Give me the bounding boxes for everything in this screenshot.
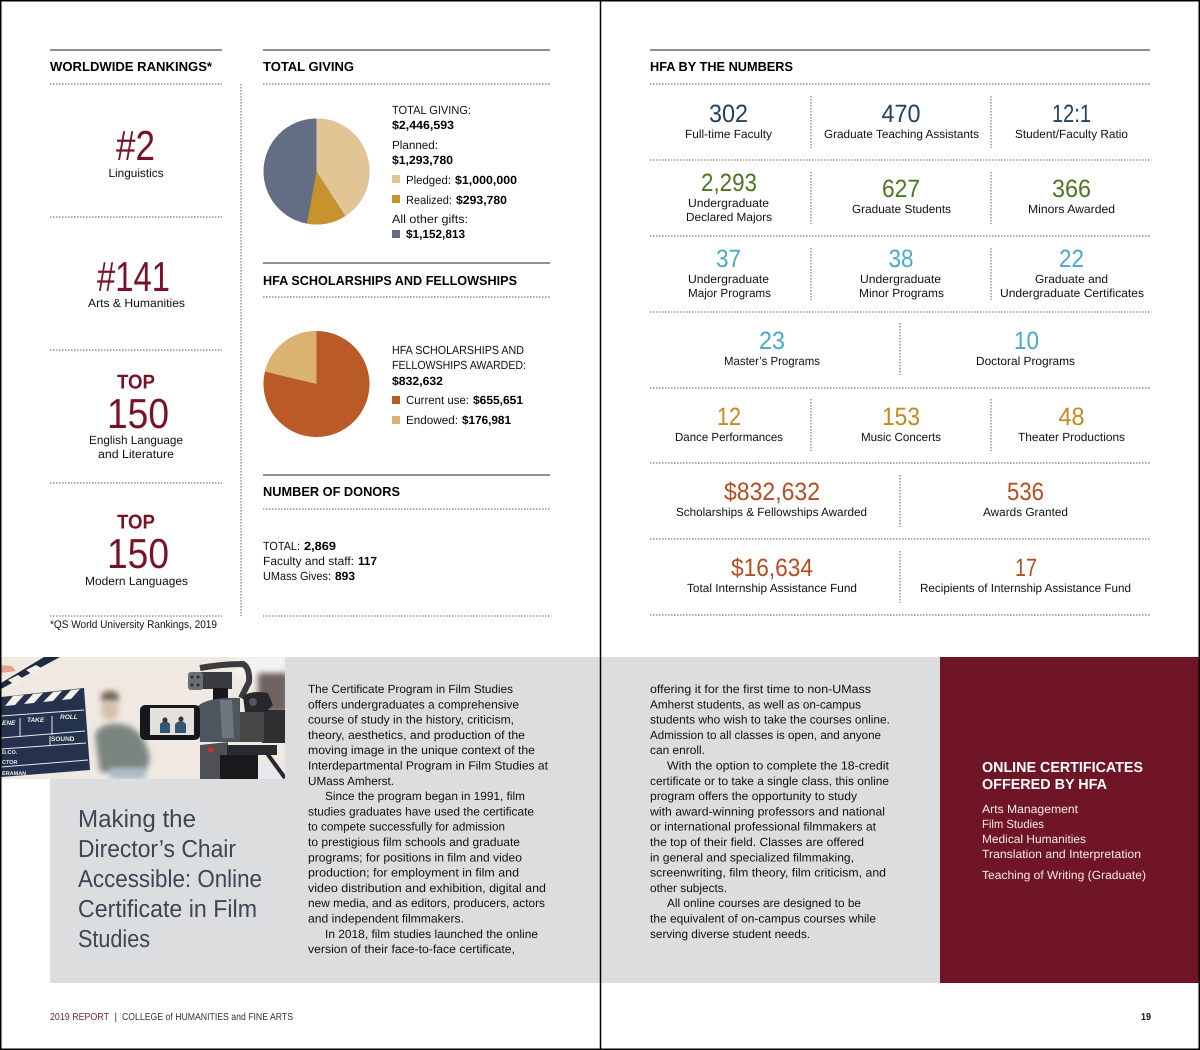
stat row: scholarships: $832,632 xyxy=(724,478,820,506)
text block: article column one: moving image in the unique context of the xyxy=(308,743,535,757)
total giving legend: $1,152,813 xyxy=(406,227,465,241)
stat row: programs: Undergraduate xyxy=(688,272,769,286)
stat row: graduate programs: 23 xyxy=(759,327,785,355)
stat row: faculty: Full-time Faculty xyxy=(685,127,772,141)
photo: clapperboard and video camera xyxy=(1,657,288,779)
donor counts: TOTAL: xyxy=(263,539,300,553)
stat row: faculty: 302 xyxy=(709,100,748,128)
heading: scholarships and fellowships: HFA SCHOLARSHIPS AND FELLOWSHIPS xyxy=(263,273,517,288)
panel: hfa by the numbers xyxy=(650,50,1150,615)
stat row: performances: Dance Performances xyxy=(675,430,783,444)
donor counts xyxy=(263,539,377,583)
text block: article column one: In 2018, film studies launched the online xyxy=(325,927,538,941)
scholarships legend: $655,651 xyxy=(473,393,523,407)
donor counts: 2,869 xyxy=(304,539,336,553)
stat row: programs: Undergraduate Certificates xyxy=(1000,286,1144,300)
text block: article column two: offering it for the first time to non-UMass xyxy=(650,682,871,696)
stat row: faculty: Graduate Teaching Assistants xyxy=(824,127,979,141)
pie chart: scholarships xyxy=(264,331,370,437)
scholarships legend: $832,632 xyxy=(392,374,443,388)
stat row: programs: Major Programs xyxy=(688,286,771,300)
text block: article column one: to compete successfully for admission xyxy=(308,820,505,834)
stat row: faculty xyxy=(685,100,1128,141)
stat row: students: Declared Majors xyxy=(686,210,772,224)
photo: clapperboard and video camera: ERAMAN xyxy=(2,771,26,777)
ranking: linguistics xyxy=(108,122,164,180)
scholarships legend: Endowed: xyxy=(406,413,458,427)
stat row: internships: 17 xyxy=(1015,554,1037,582)
page number: 19 xyxy=(1141,1012,1151,1023)
ranking: modern languages: TOP xyxy=(117,512,155,534)
text block: article column one: programs; for positions in film and video xyxy=(308,850,522,864)
stat row: graduate programs xyxy=(724,327,1075,368)
text block: article column two: or international professional filmmakers at xyxy=(650,820,877,834)
donor counts: 117 xyxy=(358,554,377,568)
text block: article column one: Interdepartmental Program in Film Studies at xyxy=(308,758,549,772)
total giving legend: $2,446,593 xyxy=(392,118,454,132)
text block: article column two: Admission to all classes is open, and anyone xyxy=(650,728,881,742)
stat row: scholarships: 536 xyxy=(1007,478,1044,506)
panel: online certificates xyxy=(940,657,1199,983)
text block: article column one: version of their face-to-face certificate, xyxy=(308,942,515,956)
text block: article column one: UMass Amherst. xyxy=(308,774,394,788)
title: making the director's chair: Making the xyxy=(78,806,196,833)
panel: number of donors xyxy=(263,475,550,616)
scholarships legend xyxy=(392,343,526,427)
heading: number of donors: NUMBER OF DONORS xyxy=(263,484,400,499)
text block: article column one: video distribution and exhibition, digital and xyxy=(308,881,546,895)
footer: | xyxy=(114,1012,117,1023)
certificate list: Arts Management xyxy=(982,802,1079,816)
stat row: graduate programs: Doctoral Programs xyxy=(976,354,1075,368)
heading: online certificates: OFFERED BY HFA xyxy=(982,777,1108,793)
photo: clapperboard and video camera: SOUND xyxy=(51,736,75,743)
footer xyxy=(50,1012,1151,1023)
text block: article column one: Since the program began in 1991, film xyxy=(325,789,525,803)
certificate list: Translation and Interpretation xyxy=(982,847,1141,861)
text block: article column two: certificate or to take a single class, this online xyxy=(650,774,889,788)
stat row: programs: 37 xyxy=(716,245,741,273)
text block: article column one: offers undergraduates a comprehensive xyxy=(308,697,519,711)
text block: article column two: the equivalent of on-campus courses while xyxy=(650,912,876,926)
stat row: scholarships: Awards Granted xyxy=(983,505,1068,519)
stat row: performances: Music Concerts xyxy=(861,430,941,444)
stat row: programs: Minor Programs xyxy=(859,286,944,300)
certificate list: Teaching of Writing (Graduate) xyxy=(982,868,1146,882)
certificate list: Film Studies xyxy=(982,817,1044,831)
ranking: english language and literature: English Language xyxy=(89,433,183,447)
scholarships legend: Current use: xyxy=(406,393,469,407)
donor counts: UMass Gives: xyxy=(263,569,331,583)
ranking: linguistics: Linguistics xyxy=(108,166,164,180)
panel: worldwide rankings xyxy=(50,50,241,631)
text block: article column two: students who wish to take the courses online. xyxy=(650,713,890,727)
ranking: modern languages: 150 xyxy=(107,530,169,577)
title: making the director's chair: Director’s Chair xyxy=(78,836,236,863)
stat row: programs: Graduate and xyxy=(1035,272,1108,286)
title: making the director's chair: Accessible: Online xyxy=(78,866,262,893)
text block: article column two: other subjects. xyxy=(650,881,727,895)
footer: COLLEGE of HUMANITIES and FINE ARTS xyxy=(122,1012,293,1023)
scholarships legend: $176,981 xyxy=(462,413,511,427)
photo: clapperboard and video camera: CTOR xyxy=(2,760,18,766)
ranking: modern languages xyxy=(85,512,188,588)
stat row: performances: 12 xyxy=(717,403,741,431)
photo: clapperboard and video camera: ROLL xyxy=(60,714,78,721)
donor counts: Faculty and staff: xyxy=(263,554,354,568)
title: making the director's chair: Certificate in Film xyxy=(78,896,257,923)
ranking: english language and literature: 150 xyxy=(107,390,169,437)
stat row: performances: 48 xyxy=(1058,403,1084,431)
stat row: students: Minors Awarded xyxy=(1028,202,1115,216)
stat row: scholarships xyxy=(676,478,1068,519)
stat row: students: 2,293 xyxy=(701,169,757,197)
photo: clapperboard and video camera: D.CO. xyxy=(2,750,18,756)
ranking: modern languages: Modern Languages xyxy=(85,574,188,588)
text block: article column two: with award-winning professors and national xyxy=(649,804,885,818)
total giving legend: Planned: xyxy=(392,138,438,152)
ranking: arts and humanities: Arts & Humanities xyxy=(88,296,185,310)
text block: article column two: the top of their field. Classes are offered xyxy=(650,835,864,849)
scholarships legend: FELLOWSHIPS AWARDED: xyxy=(392,358,526,372)
text block: article column two: can enroll. xyxy=(650,743,705,757)
total giving legend: Realized: xyxy=(406,193,452,207)
stat row: graduate programs: 10 xyxy=(1014,327,1039,355)
footnote: *QS World University Rankings, 2019 xyxy=(50,619,217,631)
stat row: students: 627 xyxy=(882,175,920,203)
panel: film studies feature background xyxy=(50,657,940,983)
text block: article column two: screenwriting, film theory, film criticism, and xyxy=(650,866,886,880)
text block: article column two xyxy=(649,682,890,941)
certificate list: Medical Humanities xyxy=(982,832,1086,846)
total giving legend: $1,000,000 xyxy=(455,173,517,187)
total giving legend xyxy=(392,103,517,241)
stat row: students: Undergraduate xyxy=(688,196,769,210)
ranking: english language and literature: TOP xyxy=(117,372,155,394)
photo: clapperboard and video camera: TAKE xyxy=(27,717,45,724)
stat row: faculty: 470 xyxy=(882,100,920,128)
ranking: arts and humanities: #141 xyxy=(97,253,170,300)
text block: article column one: to prestigious film schools and graduate xyxy=(308,835,520,849)
stat row: faculty: 12:1 xyxy=(1052,100,1091,128)
pie chart: total giving xyxy=(264,118,370,224)
text block: article column one: theory, aesthetics, and production of the xyxy=(308,728,525,742)
stat row: programs: 22 xyxy=(1059,245,1084,273)
text block: article column two: Amherst students, as well as on-campus xyxy=(650,697,861,711)
total giving legend: TOTAL GIVING: xyxy=(392,103,471,117)
title: making the director's chair: Studies xyxy=(78,926,150,953)
donor counts: 893 xyxy=(335,569,355,583)
heading: hfa by the numbers: HFA BY THE NUMBERS xyxy=(650,59,793,74)
stat row: programs: Undergraduate xyxy=(860,272,941,286)
stat row: scholarships: Scholarships & Fellowships Awarded xyxy=(676,505,867,519)
stat row: programs xyxy=(688,245,1144,300)
text block: article column one: new media, and as editors, producers, actors xyxy=(308,896,545,910)
text block: article column two: program offers the opportunity to study xyxy=(650,789,857,803)
text block: article column one: studies graduates have used the certificate xyxy=(308,804,534,818)
stat row: performances: Theater Productions xyxy=(1018,430,1125,444)
stat row: performances xyxy=(675,403,1125,444)
text block: article column two: in general and specialized filmmaking, xyxy=(650,850,854,864)
text block: article column one: course of study in the history, criticism, xyxy=(308,713,514,727)
stat row: students: 366 xyxy=(1052,175,1091,203)
total giving legend: Pledged: xyxy=(406,173,451,187)
stat row: faculty: Student/Faculty Ratio xyxy=(1015,127,1128,141)
stat row: performances: 153 xyxy=(882,403,920,431)
title: making the director's chair xyxy=(78,806,262,953)
text block: article column two: serving diverse student needs. xyxy=(650,927,810,941)
heading: total giving: TOTAL GIVING xyxy=(263,59,354,74)
stat row: internships: $16,634 xyxy=(731,554,813,582)
heading: worldwide rankings: WORLDWIDE RANKINGS* xyxy=(50,59,213,74)
stat row: graduate programs: Master’s Programs xyxy=(724,354,820,368)
stat row: students: Graduate Students xyxy=(852,202,951,216)
ranking: english language and literature xyxy=(89,372,183,461)
stat row: students xyxy=(686,169,1115,224)
ranking: english language and literature: and Literature xyxy=(98,447,174,461)
stat row: internships xyxy=(687,554,1131,595)
panel: scholarships and fellowships xyxy=(263,263,550,437)
total giving legend: All other gifts: xyxy=(392,212,468,226)
total giving legend: $293,780 xyxy=(456,193,507,207)
text block: article column two: All online courses are designed to be xyxy=(667,896,861,910)
text block: article column two: With the option to complete the 18-credit xyxy=(667,758,890,772)
ranking: linguistics: #2 xyxy=(116,122,155,169)
footer: 2019 REPORT xyxy=(50,1012,109,1023)
text block: article column one xyxy=(308,682,549,956)
certificate list xyxy=(982,802,1146,882)
text block: article column one: production; for employment in film and xyxy=(308,866,519,880)
panel: total giving xyxy=(263,50,550,241)
total giving legend: $1,293,780 xyxy=(392,153,453,167)
text block: article column one: The Certificate Program in Film Studies xyxy=(308,682,513,696)
scholarships legend: HFA SCHOLARSHIPS AND xyxy=(392,343,524,357)
heading: online certificates xyxy=(982,760,1143,793)
photo: clapperboard and video camera: ENE xyxy=(2,720,16,727)
heading: online certificates: ONLINE CERTIFICATES xyxy=(982,760,1143,776)
stat row: internships: Recipients of Internship Assistance Fund xyxy=(920,581,1131,595)
stat row: programs: 38 xyxy=(888,245,914,273)
text block: article column one: and independent filmmakers. xyxy=(308,912,464,926)
stat row: internships: Total Internship Assistance Fund xyxy=(687,581,857,595)
